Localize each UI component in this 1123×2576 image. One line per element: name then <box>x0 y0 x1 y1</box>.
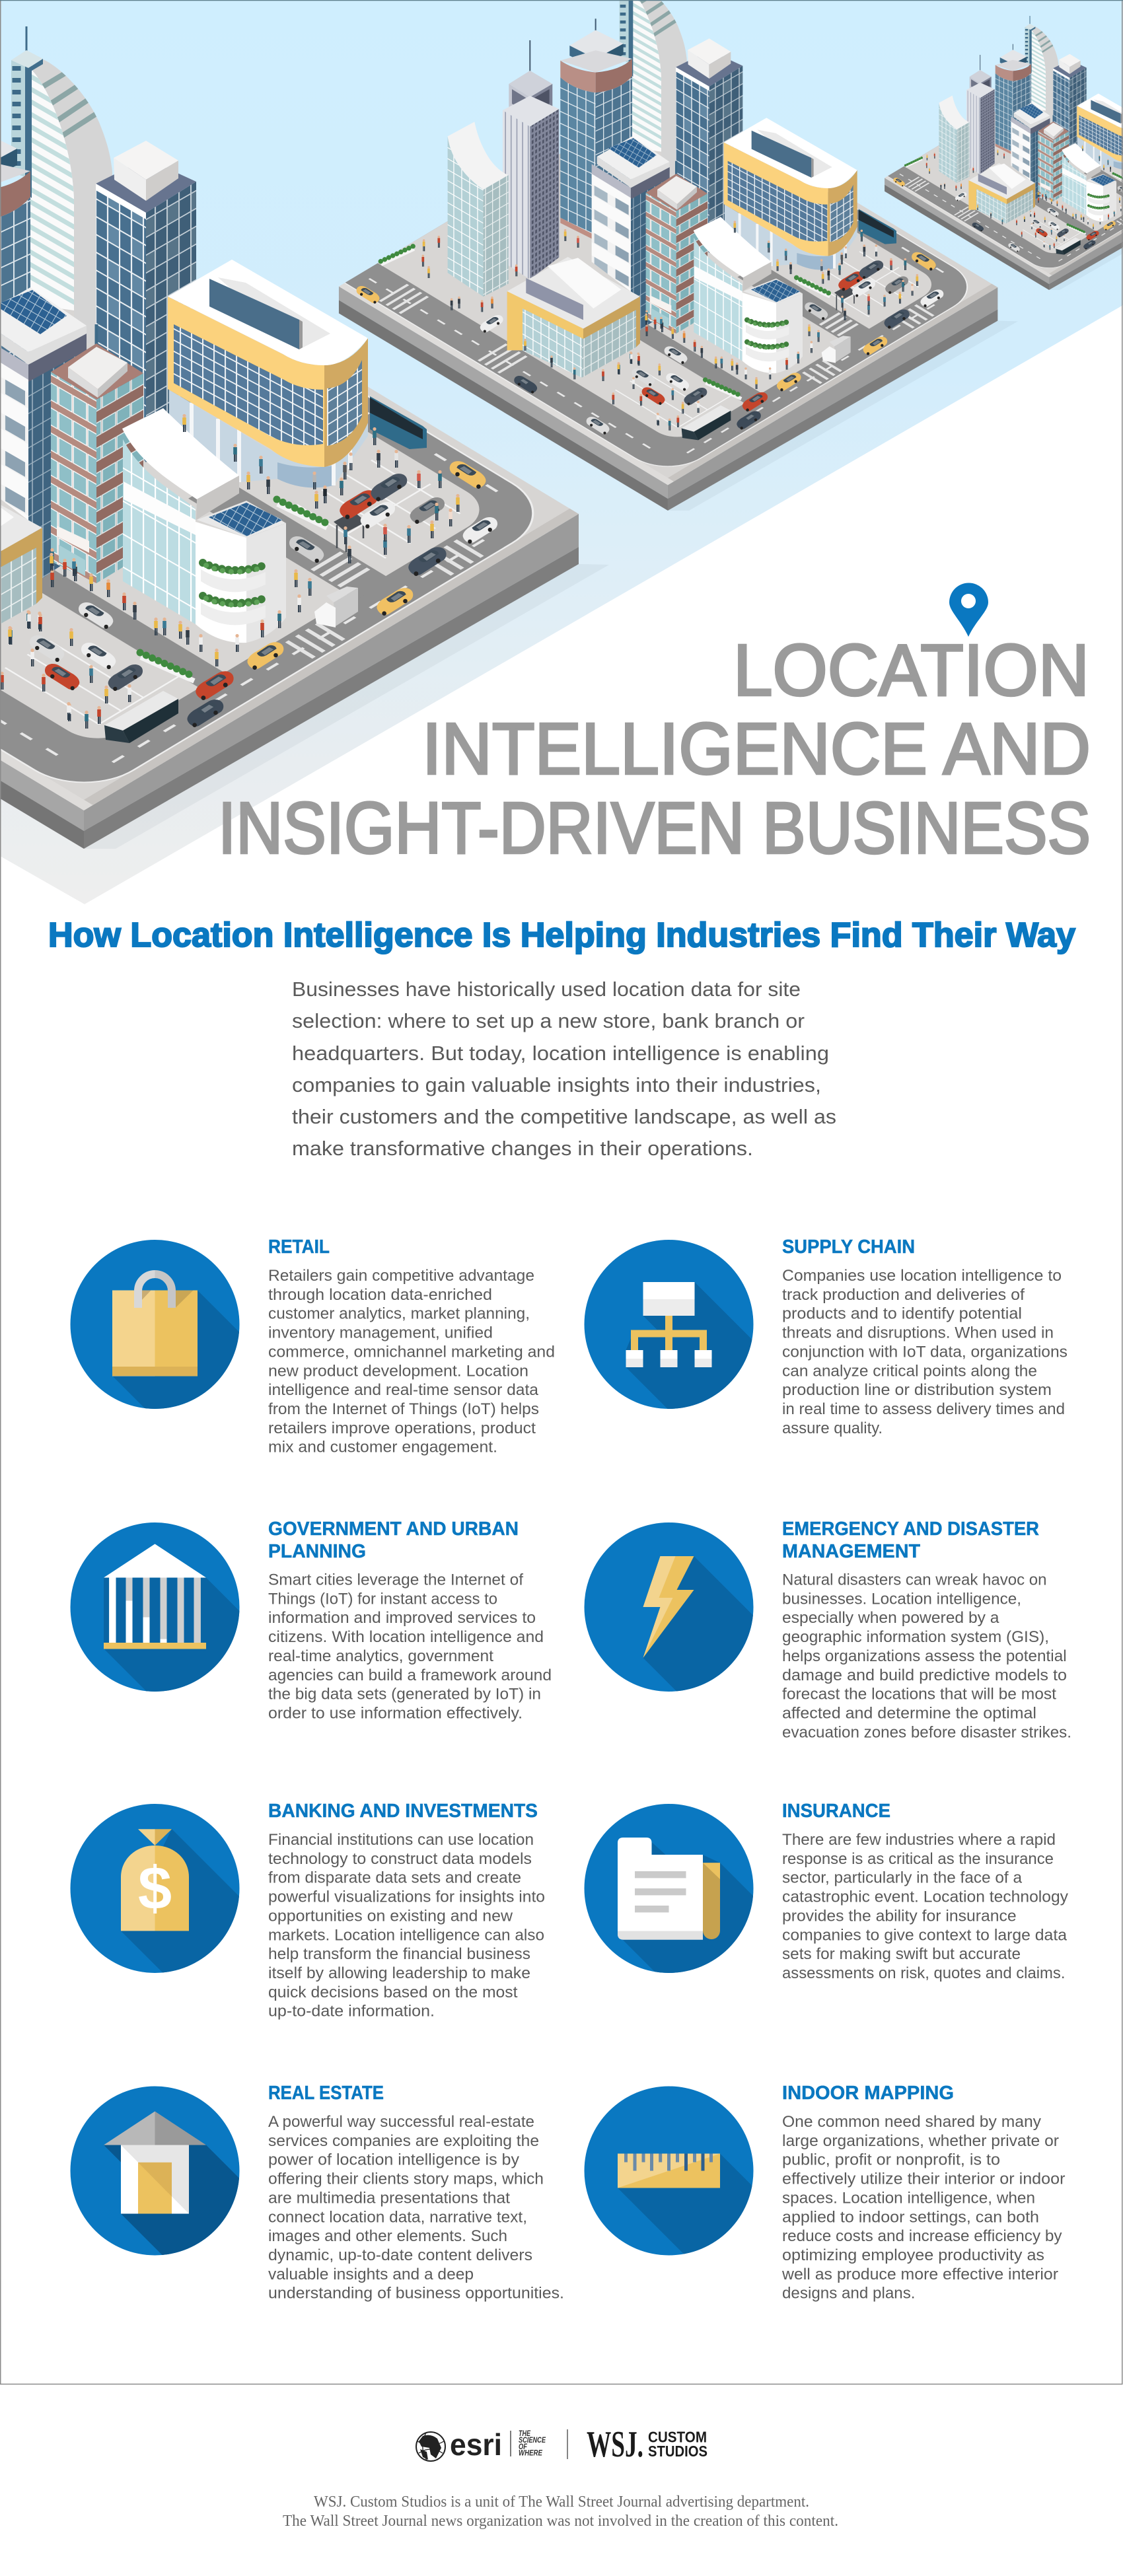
footer disclaimer <box>283 2493 838 2530</box>
heading: government and urban planning: PLANNING <box>268 1541 366 1562</box>
text: retail <box>268 1267 555 1456</box>
text: supply chain: production line or distribution system <box>782 1381 1052 1399</box>
top edge line <box>0 0 1123 1</box>
subtitle: How Location Intelligence Is Helping Industries Find Their Way <box>48 916 1075 954</box>
text: retail: from the Internet of Things (IoT) helps <box>268 1400 539 1418</box>
intro paragraph: selection: where to set up a new store, bank branch or <box>292 1009 805 1032</box>
text: emergency and disaster management <box>782 1571 1071 1741</box>
logo divider <box>567 2429 568 2459</box>
text: insurance: response is as critical as the insurance <box>782 1850 1054 1868</box>
text: indoor mapping: One common need shared by many <box>782 2113 1041 2131</box>
intro paragraph: headquarters. But today, location intelligence is enabling <box>292 1042 829 1065</box>
text: banking and investments: opportunities on existing and new <box>268 1907 513 1925</box>
heading: real estate: REAL ESTATE <box>268 2083 384 2104</box>
text: insurance: companies to give context to large data <box>782 1926 1068 1944</box>
text: insurance: sector, particularly in the face of a <box>782 1869 1023 1887</box>
text: banking and investments: powerful visualizations for insights into <box>268 1888 545 1906</box>
panel: government and urban planning <box>70 1522 551 1721</box>
text: indoor mapping: optimizing employee productivity as <box>782 2246 1044 2264</box>
panel: supply chain <box>584 1239 1067 1437</box>
logo: WSJ custom studios: STUDIOS <box>648 2443 707 2460</box>
text: indoor mapping: well as produce more effective interior <box>781 2266 1058 2283</box>
text: government and urban planning: real-time analytics, government <box>268 1647 493 1665</box>
text: real estate: are multimedia presentations that <box>268 2189 510 2207</box>
text: supply chain: Companies use location intelligence to <box>782 1267 1062 1285</box>
footer disclaimer: The Wall Street Journal news organization was not involved in the creation of this content. <box>283 2513 838 2530</box>
title: INTELLIGENCE AND <box>422 708 1091 790</box>
text: banking and investments: help transform the financial business <box>268 1945 530 1963</box>
logo: esri: THE <box>519 2430 530 2438</box>
text: retail: retailers improve operations, product <box>268 1419 536 1437</box>
icon: money bag: $ <box>138 1855 172 1922</box>
text: real estate: power of location intelligence is by <box>268 2151 519 2169</box>
icon: hierarchy chart <box>584 1240 753 1409</box>
text: emergency and disaster management: especially when powered by a <box>782 1609 999 1627</box>
text: government and urban planning: the big data sets (generated by IoT) in <box>268 1686 541 1703</box>
text: supply chain: in real time to assess delivery times and <box>782 1400 1065 1418</box>
icon: map location pin <box>949 583 988 637</box>
panel: insurance <box>584 1803 1068 1982</box>
text: real estate: services companies are exploiting the <box>268 2132 539 2150</box>
intro paragraph: make transformative changes in their operations. <box>292 1137 753 1160</box>
text: insurance: There are few industries where a rapid <box>782 1831 1056 1849</box>
text: emergency and disaster management: affected and determine the optimal <box>782 1704 1036 1723</box>
logo: esri: SCIENCE <box>519 2437 546 2445</box>
text: government and urban planning: Smart cities leverage the Internet of <box>268 1571 523 1589</box>
text: indoor mapping: reduce costs and increase efficiency by <box>782 2227 1062 2245</box>
text: banking and investments: quick decisions based on the most <box>268 1984 518 2001</box>
text: insurance: provides the ability for insurance <box>782 1907 1017 1925</box>
text: real estate: understanding of business opportunities. <box>268 2285 564 2303</box>
text: government and urban planning: information and improved services to <box>268 1609 536 1627</box>
title: LOCATION <box>733 630 1089 711</box>
text: emergency and disaster management: damage and build predictive models to <box>782 1666 1067 1684</box>
text: retail: new product development. Location <box>268 1362 528 1380</box>
panel: indoor mapping <box>584 2083 1066 2320</box>
icon: lightning bolt <box>584 1522 753 1692</box>
text: emergency and disaster management: geographic information system (GIS), <box>782 1628 1049 1646</box>
intro paragraph: Businesses have historically used location data for site <box>292 978 801 1001</box>
panel: real estate <box>70 2086 563 2301</box>
text: retail: Retailers gain competitive advantage <box>268 1267 534 1285</box>
text: insurance <box>782 1831 1068 1982</box>
heading: supply chain: SUPPLY CHAIN <box>782 1236 915 1258</box>
text: indoor mapping: designs and plans. <box>782 2285 916 2303</box>
text: insurance: catastrophic event. Location technology <box>782 1888 1068 1906</box>
logo: esri <box>416 2427 546 2462</box>
text: indoor mapping: applied to indoor settings, can both <box>782 2208 1039 2226</box>
text: insurance: assessments on risk, quotes and claims. <box>782 1964 1065 1982</box>
heading: government and urban planning: GOVERNMENT AND URBAN <box>268 1519 519 1540</box>
intro paragraph: their customers and the competitive landscape, as well as <box>292 1105 836 1128</box>
title <box>218 630 1091 869</box>
text: supply chain: conjunction with IoT data, organizations <box>782 1343 1068 1361</box>
text: retail: customer analytics, market planning, <box>268 1305 530 1323</box>
text: banking and investments: from disparate data sets and create <box>268 1869 521 1887</box>
heading: emergency and disaster management: MANAGEMENT <box>782 1541 921 1562</box>
text: supply chain: can analyze critical points along the <box>782 1362 1037 1380</box>
heading: emergency and disaster management <box>782 1519 1039 1562</box>
logo: esri: esri <box>450 2427 502 2462</box>
intro paragraph <box>292 978 836 1160</box>
panel: banking and investments <box>70 1803 544 2020</box>
text: real estate: valuable insights and a deep <box>268 2266 474 2283</box>
text: banking and investments: technology to construct data models <box>268 1850 532 1868</box>
panel: emergency and disaster management <box>584 1522 1070 1737</box>
text: real estate <box>268 2113 564 2303</box>
text: government and urban planning: order to use information effectively. <box>268 1704 523 1723</box>
text: real estate: connect location data, narrative text, <box>268 2208 527 2226</box>
text: emergency and disaster management: businesses. Location intelligence, <box>782 1590 1021 1608</box>
text: banking and investments: Financial institutions can use location <box>268 1831 534 1849</box>
illustration: distant isometric city block <box>849 16 1123 290</box>
text: government and urban planning: citizens. With location intelligence and <box>268 1628 544 1646</box>
intro paragraph: companies to gain valuable insights into their industries, <box>292 1073 821 1096</box>
footer disclaimer: WSJ. Custom Studios is a unit of The Wall Street Journal advertising department. <box>314 2493 809 2511</box>
heading: emergency and disaster management: EMERGENCY AND DISASTER <box>782 1519 1039 1540</box>
text: real estate: offering their clients story maps, which <box>268 2170 544 2188</box>
text: retail: inventory management, unified <box>268 1324 493 1342</box>
logo: WSJ custom studios: WSJ. <box>587 2424 643 2465</box>
text: real estate: A powerful way successful real-estate <box>268 2113 534 2131</box>
text: banking and investments: markets. Location intelligence can also <box>268 1926 544 1944</box>
text: banking and investments: itself by allowing leadership to make <box>268 1964 530 1982</box>
text: banking and investments <box>268 1831 545 2021</box>
icon: document folder <box>584 1804 753 1973</box>
heading: banking and investments: BANKING AND INVESTMENTS <box>268 1801 538 1822</box>
text: real estate: dynamic, up-to-date content delivers <box>268 2246 532 2264</box>
illustration: middle isometric city block <box>267 0 1018 511</box>
text: emergency and disaster management: Natural disasters can wreak havoc on <box>782 1571 1046 1589</box>
text: retail: intelligence and real-time sensor data <box>268 1381 539 1399</box>
text: retail: through location data-enriched <box>268 1286 492 1304</box>
text: indoor mapping: effectively utilize their interior or indoor <box>782 2170 1066 2188</box>
hero sky background <box>0 0 1123 904</box>
text: retail: mix and customer engagement. <box>268 1439 497 1456</box>
text: indoor mapping: public, profit or nonprofit, is to <box>782 2151 1000 2169</box>
text: indoor mapping <box>781 2113 1066 2303</box>
text: government and urban planning: agencies can build a framework around <box>268 1666 552 1684</box>
text: supply chain <box>782 1267 1068 1437</box>
heading: government and urban planning <box>268 1519 519 1562</box>
text: emergency and disaster management: evacuation zones before disaster strikes. <box>782 1723 1071 1741</box>
text: banking and investments: up-to-date information. <box>268 2003 435 2021</box>
icon: government building <box>70 1522 239 1692</box>
logo: esri: OF <box>519 2443 528 2451</box>
text: supply chain: threats and disruptions. When used in <box>782 1324 1054 1342</box>
text: indoor mapping: spaces. Location intelligence, when <box>782 2189 1035 2207</box>
heading: insurance: INSURANCE <box>782 1801 890 1822</box>
text: insurance: sets for making swift but accurate <box>782 1945 1021 1963</box>
icon: house <box>70 2086 239 2255</box>
heading: retail: RETAIL <box>268 1236 330 1258</box>
illustration: foreground isometric city block <box>0 26 609 849</box>
text: supply chain: assure quality. <box>782 1419 883 1437</box>
text: government and urban planning <box>268 1571 552 1723</box>
icon: money bag <box>70 1804 239 1973</box>
panel: retail <box>70 1239 554 1456</box>
icon: ruler <box>584 2086 852 2320</box>
text: real estate: images and other elements. Such <box>268 2227 507 2245</box>
logo: WSJ custom studios: CUSTOM <box>648 2428 707 2445</box>
heading: indoor mapping: INDOOR MAPPING <box>782 2083 954 2104</box>
text: indoor mapping: large organizations, whether private or <box>782 2132 1059 2150</box>
text: supply chain: products and to identify potential <box>782 1305 1022 1323</box>
text: emergency and disaster management: helps organizations assess the potential <box>782 1647 1067 1665</box>
icon: shopping bag <box>70 1240 239 1409</box>
text: retail: commerce, omnichannel marketing and <box>268 1343 555 1361</box>
text: government and urban planning: Things (IoT) for instant access to <box>268 1590 497 1608</box>
logo: esri: WHERE <box>519 2449 542 2457</box>
text: supply chain: track production and deliveries of <box>782 1286 1025 1304</box>
text: emergency and disaster management: forecast the locations that will be most <box>782 1686 1056 1703</box>
